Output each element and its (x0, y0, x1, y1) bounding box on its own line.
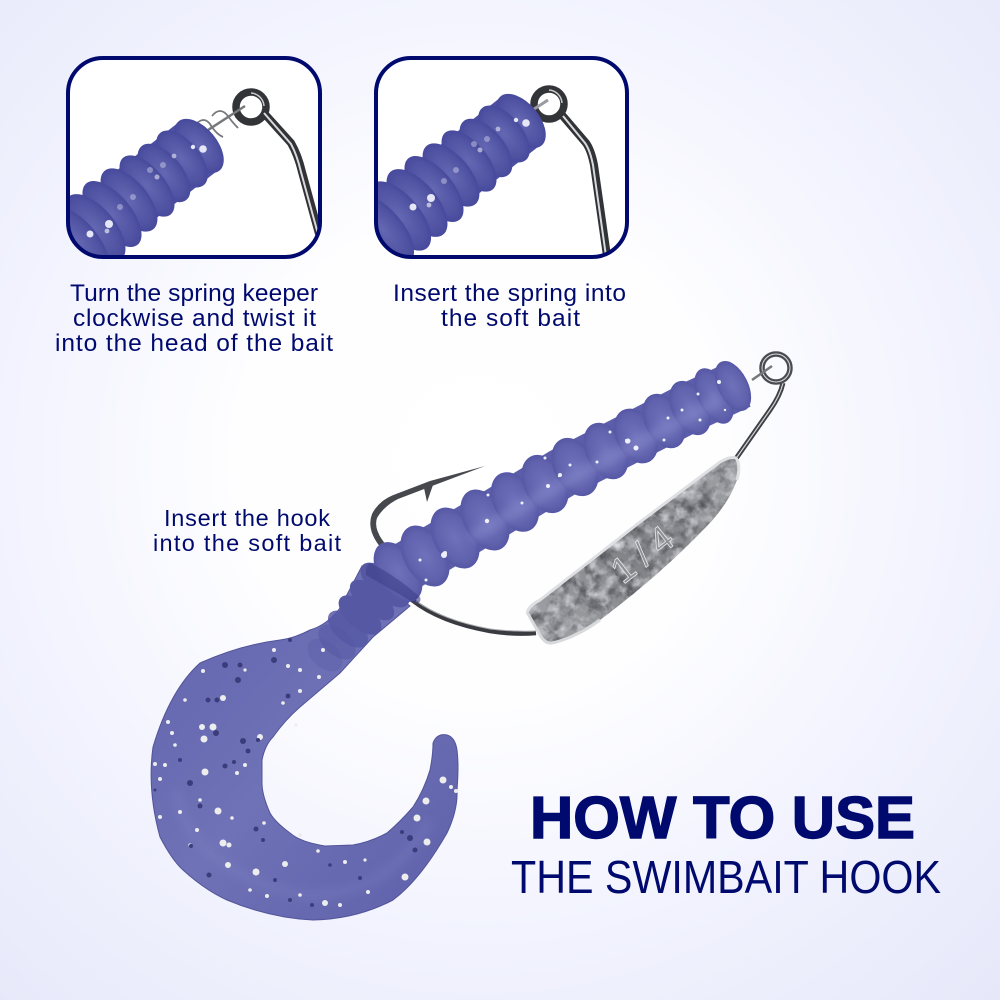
title: HOW TO USE (530, 785, 915, 851)
soft bait tail (151, 566, 458, 920)
lead weight (527, 458, 739, 643)
text: step 1 caption (55, 280, 333, 357)
icon: hook point and barb (370, 466, 485, 548)
icon: spring keeper (196, 106, 245, 137)
body pale highlight (470, 400, 720, 538)
glitter, step 2 (410, 118, 530, 210)
soft bait body (364, 355, 759, 611)
icon: hook eye and shank, step 1 (236, 92, 319, 234)
bait body, step 2 (378, 94, 546, 255)
text: step 3 caption (153, 505, 341, 556)
text: step 2 caption (393, 280, 626, 332)
bait collar (366, 563, 420, 604)
icon: hook eye and shank (735, 354, 790, 460)
glitter, step 1 (86, 145, 207, 238)
weight marking: 1/4 (603, 517, 682, 591)
text: step 2 caption: Insert the spring into (393, 280, 626, 307)
text: step 1 caption: into the head of the bait (55, 330, 333, 357)
title (511, 785, 941, 903)
panel: step 2 photo (374, 56, 629, 259)
subtitle: THE SWIMBAIT HOOK (511, 851, 941, 903)
bait body, step 1 (70, 118, 224, 255)
text: step 3 caption: Insert the hook (164, 505, 330, 531)
icon: hook bend (412, 600, 536, 634)
text: step 2 caption: the soft bait (441, 305, 580, 332)
text: step 1 caption: Turn the spring keeper (70, 280, 318, 307)
tail lighter band (175, 790, 430, 895)
body glitter (418, 380, 726, 582)
panel: step 1 photo (66, 56, 322, 259)
tail glitter (153, 638, 458, 907)
text: step 3 caption: into the soft bait (153, 530, 341, 556)
main illustration: rigged swimbait (151, 354, 790, 920)
text: step 1 caption: clockwise and twist it (73, 305, 316, 332)
icon: hook eye and shank, step 2 (528, 89, 607, 256)
tail ribbed neck (301, 555, 417, 678)
